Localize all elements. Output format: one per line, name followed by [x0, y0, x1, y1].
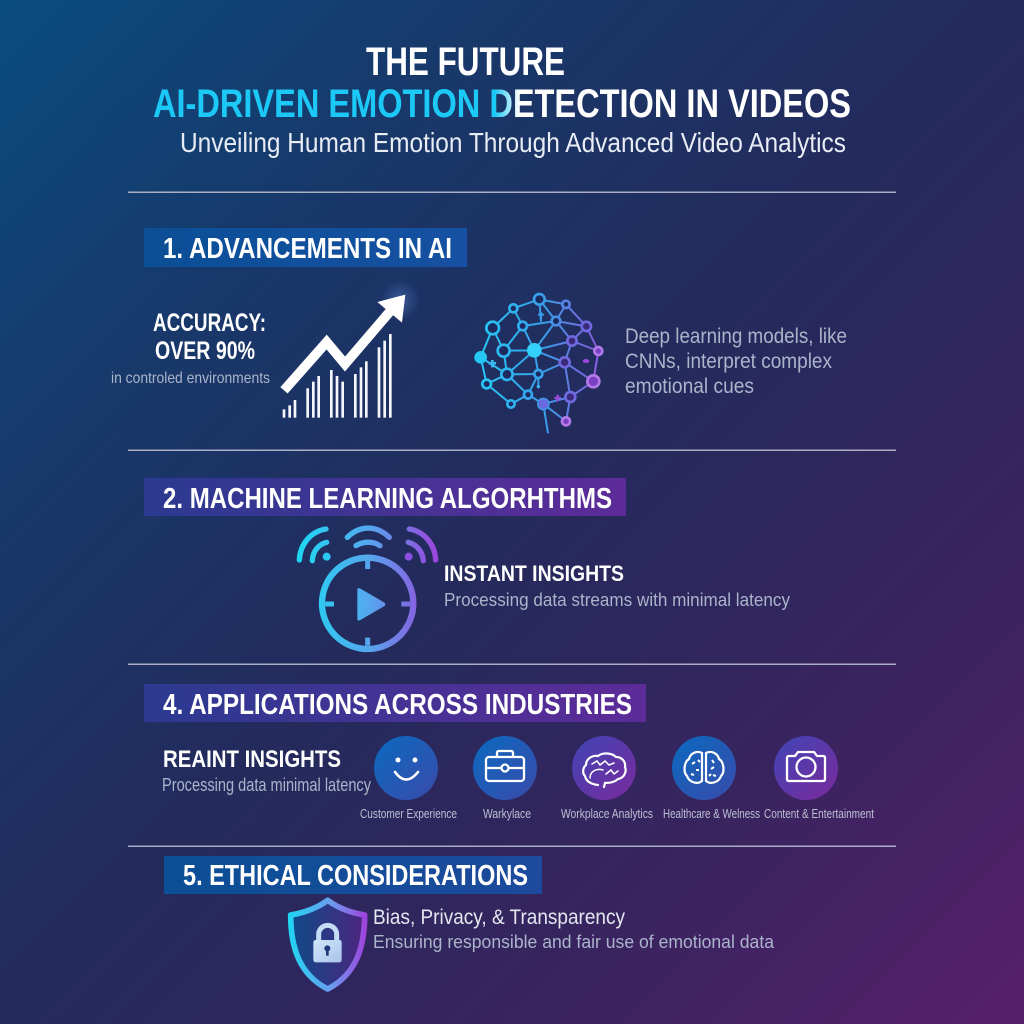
description text	[625, 325, 847, 398]
ethics text: Ensuring responsible and fair use of emotional data	[373, 931, 775, 952]
icon: camera	[774, 736, 838, 800]
heading 5: 5. ETHICAL CONSIDERATIONS	[183, 860, 528, 892]
icon: healthcare brain	[672, 736, 736, 800]
chart: rising arrow and bars	[283, 280, 420, 418]
icon: customer experience smile	[374, 736, 438, 800]
title line 1: THE FUTURE	[366, 40, 565, 84]
ethics text: Bias, Privacy, & Transparency	[373, 906, 625, 929]
accuracy stat: in controled environments	[111, 370, 270, 387]
heading 1	[144, 228, 467, 267]
icon: shield with padlock	[291, 900, 365, 989]
realtime insights text: Processing data minimal latency	[162, 775, 371, 795]
instant insights text	[444, 561, 791, 610]
label: content and entertainment: Content & Entertainment	[764, 806, 874, 821]
subtitle: Unveiling Human Emotion Through Advanced Video Analytics	[180, 127, 846, 158]
panel: section 5 ethical considerations	[164, 856, 775, 989]
label: workplace analytics: Workplace Analytics	[561, 806, 653, 821]
description text: CNNs, interpret complex	[625, 350, 832, 373]
realtime insights text	[162, 746, 371, 795]
accuracy stat: ACCURACY:	[153, 309, 266, 337]
title block	[153, 40, 851, 158]
instant insights text: INSTANT INSIGHTS	[444, 561, 624, 586]
heading 4: 4. APPLICATIONS ACROSS INDUSTRIES	[163, 689, 632, 721]
icon: stopwatch with play button and signal waves	[299, 528, 436, 649]
icon: workplace analytics brain	[572, 736, 636, 800]
description text: emotional cues	[625, 375, 754, 398]
label: healthcare and wellness: Healthcare & Welness	[663, 806, 760, 821]
label: workplace: Warkylace	[483, 806, 531, 821]
heading 1: 1. ADVANCEMENTS IN AI	[163, 233, 452, 265]
panel: section 4 applications across industries	[144, 684, 874, 821]
heading 2: 2. MACHINE LEARNING ALGORHTHMS	[163, 483, 612, 515]
title line 2: AI-DRIVEN EMOTION DETECTION IN VIDEOS	[153, 82, 851, 126]
icon: workplace briefcase	[473, 736, 537, 800]
accuracy stat	[111, 309, 270, 387]
realtime insights text: REAINT INSIGHTS	[163, 746, 341, 773]
heading 5	[164, 856, 542, 894]
icon: neural network brain	[474, 294, 602, 433]
panel: section 2 machine learning algorithms	[144, 478, 791, 649]
ethics text	[373, 906, 775, 952]
accuracy stat: OVER 90%	[155, 337, 255, 365]
panel: section 1 advancements in AI	[111, 228, 847, 433]
label: customer experience: Customer Experience	[360, 806, 457, 821]
instant insights text: Processing data streams with minimal latency	[444, 589, 791, 610]
description text: Deep learning models, like	[625, 325, 847, 348]
